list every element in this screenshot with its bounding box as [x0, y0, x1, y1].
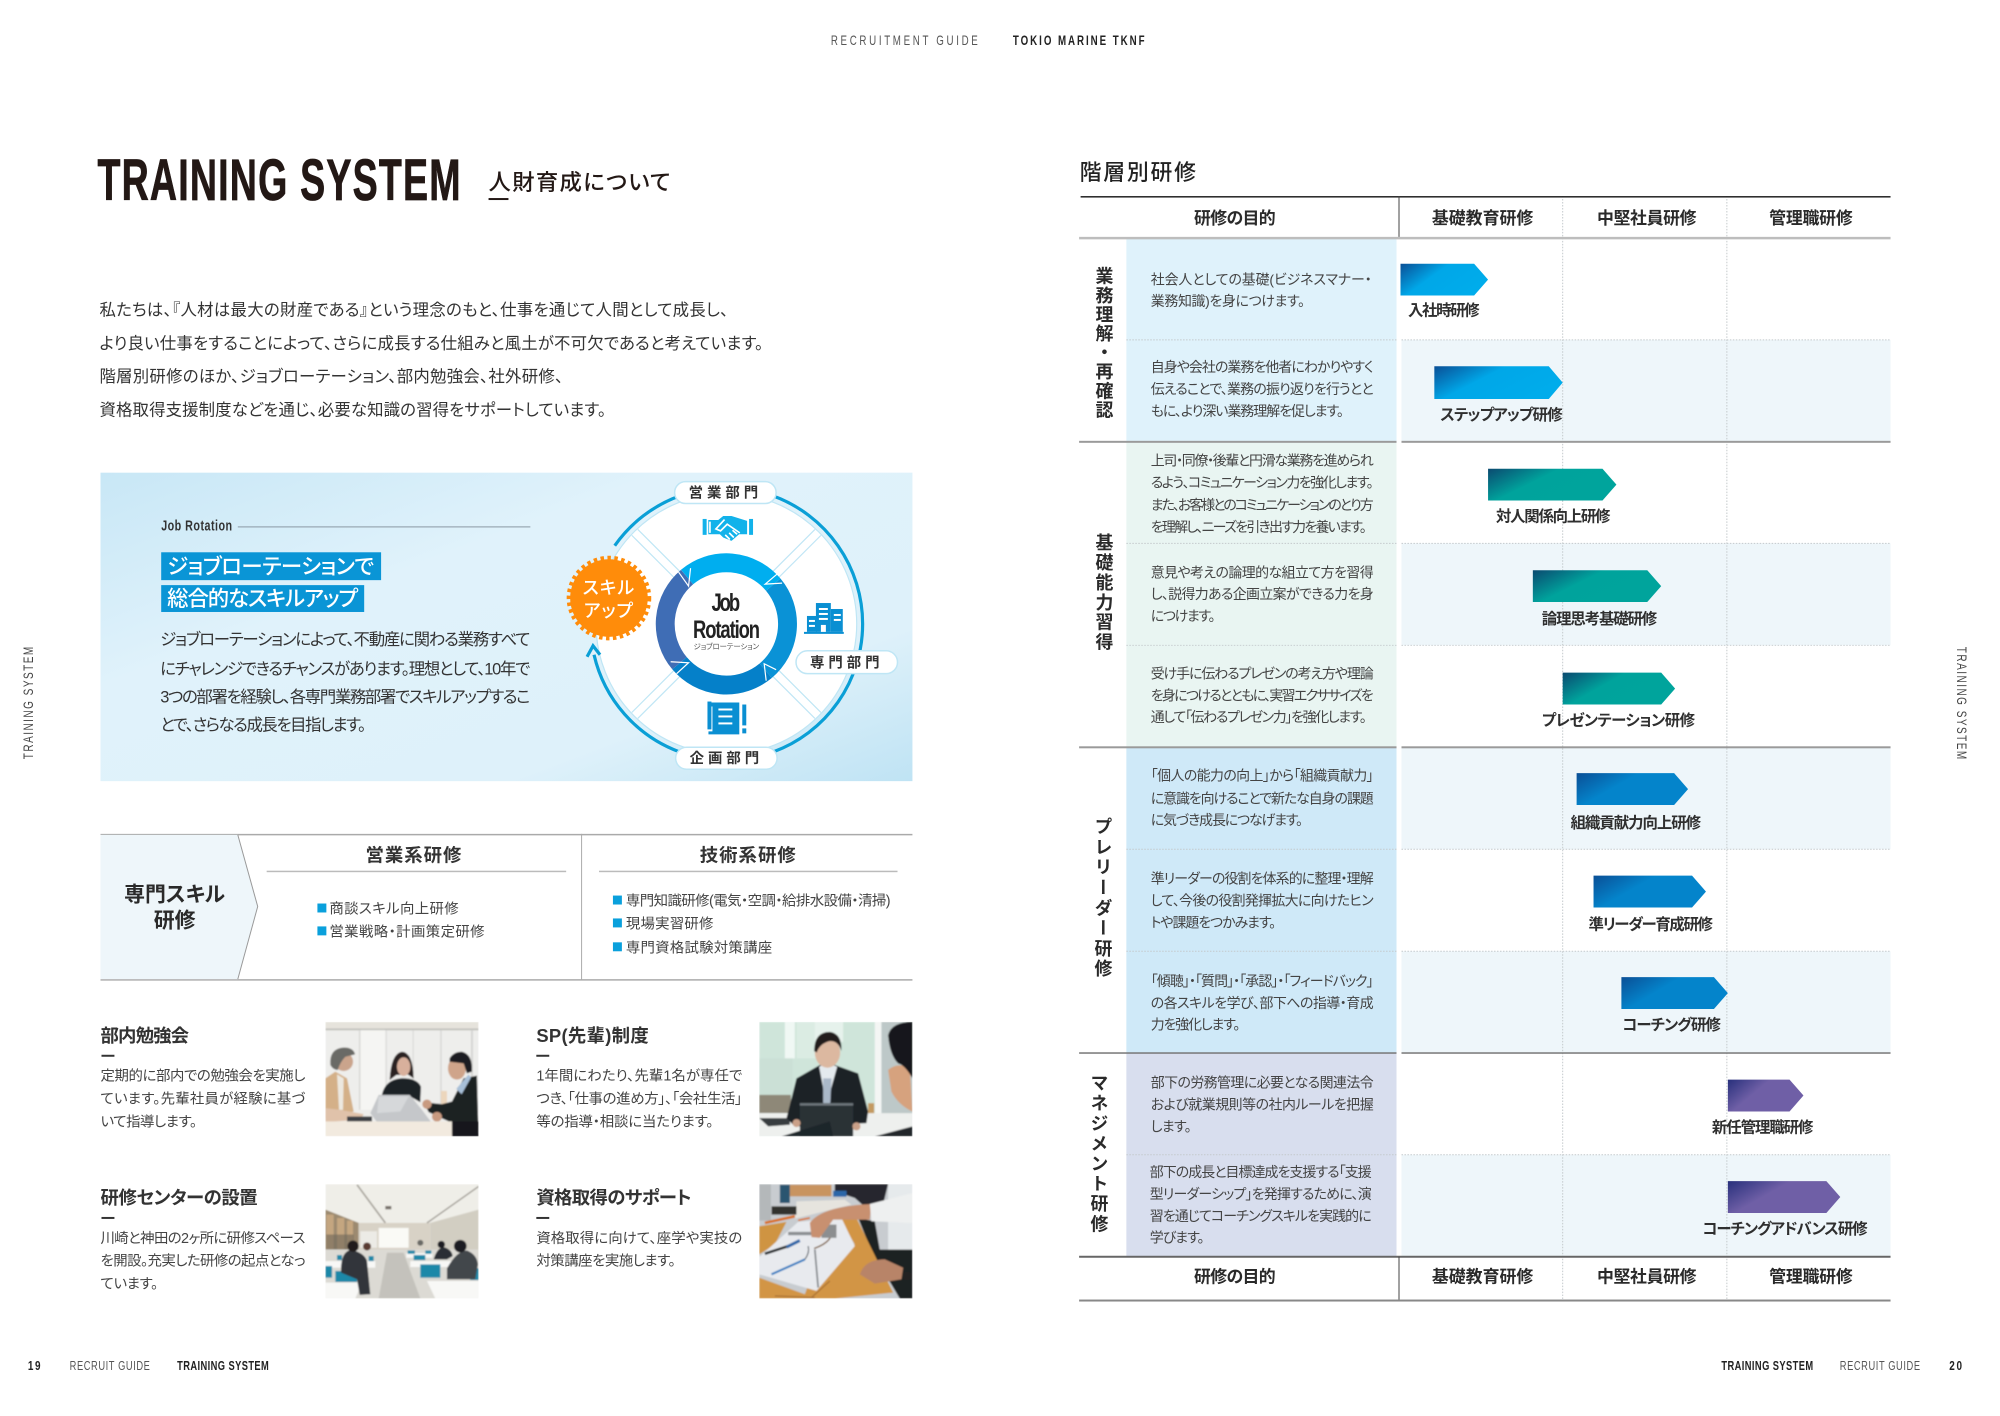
row 1: 業務知識)を身につけます。: [1151, 293, 1305, 309]
arrow: new manager training: [1712, 1080, 1814, 1136]
arrow: advanced coaching training: [1702, 1181, 1868, 1238]
pill: sales dept: [675, 482, 776, 504]
intro text: [100, 301, 763, 419]
row 8: [1151, 973, 1728, 1034]
card: study sessions: [100, 1025, 305, 1130]
footer left: 19: [28, 1360, 41, 1374]
arrow: advanced coaching training: コーチングアドバンス研修: [1702, 1219, 1868, 1238]
skill heading: 専門スキル: [124, 884, 225, 907]
photo: training room: [325, 1184, 479, 1298]
icon: building: [804, 603, 844, 634]
sales training column: [267, 845, 566, 940]
pill: specialist dept: 専門部門: [810, 654, 884, 672]
row 5: 通して「伝わるプレゼン力」を強化します。: [1151, 709, 1367, 725]
card: training center: ています。: [100, 1276, 158, 1293]
outer cycle arrow: [587, 496, 863, 752]
category labels: 業務理解・再確認: [1093, 267, 1113, 420]
card: senior partner system: つき、「仕事の進め方」、「会社生活」: [536, 1091, 742, 1108]
arrow: new hire training: [1400, 264, 1488, 319]
arrow: presentation training: プレゼンテーション研修: [1542, 710, 1696, 729]
card: study sessions: ています。先輩社員が経験に基づ: [100, 1091, 305, 1108]
top header: [831, 32, 1145, 48]
footer left: TRAINING SYSTEM: [177, 1360, 269, 1374]
arrow: logical thinking training: 論理思考基礎研修: [1542, 610, 1658, 628]
job rotation body text: にチャレンジできるチャンスがあります。理想として、10年で: [160, 661, 531, 679]
row 8: 力を強化します。: [1151, 1016, 1240, 1032]
row 10: 部下の成長と目標達成を支援する「支援: [1150, 1164, 1372, 1180]
skill heading: 研修: [154, 909, 196, 932]
card: training center: 川崎と神田の2ヶ所に研修スペース: [100, 1230, 305, 1247]
footer right: TRAINING SYSTEM: [1721, 1360, 1813, 1374]
row 6: に気づき成長につなげます。: [1151, 812, 1303, 828]
row 9: および就業規則等の社内ルールを把握: [1151, 1096, 1374, 1112]
top column headers: 基礎教育研修: [1432, 209, 1533, 228]
sales training column: 営業系研修: [365, 845, 462, 866]
card: qualification support: 資格取得のサポート: [536, 1187, 692, 1208]
sales training column: 営業戦略・計画策定研修: [329, 923, 485, 940]
row 3: 上司・同僚・後輩と円滑な業務を進められ: [1151, 453, 1374, 469]
card: senior partner system: SP(先輩)制度: [536, 1025, 649, 1046]
row 4: につけます。: [1151, 608, 1215, 624]
job rotation body text: とで、さらなる成長を目指します。: [160, 716, 366, 734]
row 7: トや課題をつかみます。: [1151, 914, 1276, 930]
row 6: [1151, 768, 1702, 832]
top column headers: 中堅社員研修: [1597, 209, 1697, 228]
top header: RECRUITMENT GUIDE: [831, 32, 978, 48]
technical training column: 現場実習研修: [626, 915, 714, 932]
row 10: 型リーダーシップ」を発揮するために、演: [1150, 1186, 1372, 1202]
row 2: 伝えることで、業務の振り返りを行うとと: [1151, 381, 1374, 397]
row 6: 「個人の能力の向上」から「組織貢献力」: [1151, 768, 1374, 784]
bottom column headers: 管理職研修: [1769, 1267, 1853, 1287]
row 5: を身につけるとともに、実習エクササイズを: [1151, 688, 1374, 704]
job rotation body text: ジョブローテーションによって、不動産に関わる業務すべて: [160, 630, 530, 649]
bottom column headers: 研修の目的: [1194, 1268, 1276, 1287]
panel: job rotation: [100, 473, 912, 781]
row 9: 部下の労務管理に必要となる関連法令: [1151, 1075, 1374, 1091]
job rotation body text: 3つの部署を経験し、各専門業務部署でスキルアップするこ: [160, 689, 530, 707]
center label: ジョブローテーション: [694, 641, 759, 651]
table rules: [1079, 196, 1891, 1302]
category labels: [1089, 267, 1113, 1235]
row 10: [1150, 1164, 1868, 1245]
row 3: また、お客様とのコミュニケーションのとり方: [1151, 497, 1374, 513]
bottom column headers: 基礎教育研修: [1432, 1268, 1533, 1287]
pill: planning dept: 企画部門: [690, 749, 763, 767]
row 9: します。: [1151, 1118, 1192, 1134]
card: qualification support: 対策講座を実施します。: [536, 1253, 676, 1270]
photo: man in suit with tablet: [759, 1022, 912, 1136]
arrow: new hire training: 入社時研修: [1408, 301, 1480, 319]
pill: sales dept: 営業部門: [689, 484, 762, 502]
row 7: して、今後の役割発揮拡大に向けたヒン: [1151, 893, 1374, 909]
highlighted heading: [161, 552, 381, 612]
row tints: [1126, 196, 1891, 1301]
heading: tiered training: 階層別研修: [1080, 160, 1196, 185]
center label: Job: [711, 588, 740, 617]
arrow: step up training: [1434, 366, 1563, 424]
row 8: の各スキルを学び、部下への指導・育成: [1151, 995, 1374, 1011]
highlighted heading: ジョブローテーションで: [167, 554, 374, 579]
badge: skill up: アップ: [584, 601, 634, 621]
arrow: logical thinking training: [1533, 570, 1661, 628]
row 3: [1151, 453, 1616, 535]
title: 人財育成について: [489, 170, 671, 195]
row 4: し、説得力ある企画立案ができる力を身: [1151, 586, 1374, 602]
card: qualification support: 資格取得に向けて、座学や実技の: [536, 1230, 742, 1247]
row 5: [1151, 666, 1696, 729]
rotation diagram: [569, 482, 898, 769]
bottom column headers: 中堅社員研修: [1597, 1268, 1697, 1287]
badge: skill up: スキル: [583, 578, 635, 598]
arrow: new manager training: 新任管理職研修: [1712, 1117, 1814, 1136]
top header: TOKIO MARINE TKNF: [1013, 32, 1145, 48]
title: [98, 148, 671, 213]
row 1: 社会人としての基礎(ビジネスマナー・: [1151, 272, 1372, 288]
card: senior partner system: [536, 1025, 742, 1130]
card: qualification support: [536, 1187, 742, 1270]
intro text: 階層別研修のほか、ジョブローテーション、部内勉強会、社外研修、: [100, 367, 563, 386]
arrow: organizational contribution training: 組織貢献力向上研修: [1571, 814, 1702, 832]
inner ring: [665, 563, 788, 685]
arrow: coaching training: コーチング研修: [1622, 1015, 1721, 1034]
badge: skill up: [569, 558, 649, 638]
row 6: に意識を向けることで新たな自身の課題: [1151, 791, 1374, 807]
row 10: 習を通じてコーチングスキルを実践的に: [1150, 1208, 1372, 1224]
arrow: junior leader training: [1589, 876, 1714, 933]
row 3: るよう、コミュニケーション力を強化します。: [1151, 475, 1374, 491]
card: study sessions: 定期的に部内での勉強会を実施し: [100, 1068, 305, 1085]
arrow: interpersonal training: [1488, 469, 1616, 525]
job rotation body text: [160, 630, 531, 734]
row 5: 受け手に伝わるプレゼンの考え方や理論: [1151, 666, 1374, 682]
row 1: [1151, 264, 1488, 319]
icon: document: [707, 702, 746, 734]
pill: specialist dept: [796, 651, 898, 674]
category labels: 基礎能力習得: [1093, 533, 1113, 653]
panel: specialist skill training: [100, 834, 912, 981]
row 4: 意見や考えの論理的な組立て方を習得: [1151, 565, 1374, 581]
center label: [693, 588, 760, 651]
card: study sessions: いて指導します。: [100, 1113, 197, 1130]
row 7: [1151, 871, 1714, 933]
row 2: もに、より深い業務理解を促します。: [1151, 403, 1344, 419]
row 9: [1151, 1075, 1814, 1136]
top column headers: 管理職研修: [1769, 208, 1853, 228]
footer right: RECRUIT GUIDE: [1840, 1360, 1920, 1374]
center label: Rotation: [693, 615, 760, 644]
card: senior partner system: 等の指導・相談に当たります。: [536, 1112, 713, 1130]
job rotation label: Job Rotation: [161, 517, 232, 534]
table: tiered training: [1079, 196, 1891, 1302]
card: training center: を開設。充実した研修の起点となっ: [100, 1253, 305, 1270]
arrow: interpersonal training: 対人関係向上研修: [1496, 507, 1611, 525]
arrow: step up training: ステップアップ研修: [1440, 406, 1563, 424]
row 8: 「傾聴」・「質問」・「承認」・「フィードバック」: [1151, 973, 1374, 989]
row 3: を理解し、ニーズを引き出す力を養います。: [1151, 519, 1367, 535]
pill: planning dept: [676, 747, 777, 769]
footer right: 20: [1949, 1360, 1962, 1374]
side label left: TRAINING SYSTEM: [20, 647, 36, 759]
sales training column: 商談スキル向上研修: [329, 900, 459, 917]
intro text: 資格取得支援制度などを通じ、必要な知識の習得をサポートしています。: [100, 401, 606, 419]
footer left: RECRUIT GUIDE: [70, 1360, 150, 1374]
side label right: TRAINING SYSTEM: [1954, 647, 1970, 759]
arrow: presentation training: [1542, 673, 1696, 729]
photo: meeting of three: [325, 1022, 479, 1136]
footer right: [1721, 1360, 1962, 1374]
intro text: より良い仕事をすることによって、さらに成長する仕組みと風土が不可欠であると考えています。: [100, 335, 763, 353]
arrow: coaching training: [1621, 977, 1728, 1034]
title: TRAINING SYSTEM: [98, 148, 460, 213]
card: study sessions: 部内勉強会: [100, 1025, 190, 1046]
top column headers: 研修の目的: [1194, 209, 1276, 228]
row 7: 準リーダーの役割を体系的に整理・理解: [1151, 871, 1374, 887]
highlighted heading: 総合的なスキルアップ: [167, 587, 358, 611]
category labels: プレリーダー研修: [1092, 817, 1112, 980]
row 2: 自身や会社の業務を他者にわかりやすく: [1151, 359, 1374, 375]
arrow: organizational contribution training: [1571, 773, 1702, 832]
technical training column: [599, 845, 898, 956]
technical training column: 技術系研修: [700, 845, 797, 866]
bottom column headers: [1194, 1267, 1853, 1287]
technical training column: 専門資格試験対策講座: [626, 939, 772, 956]
row 10: 学びます。: [1150, 1229, 1204, 1245]
top column headers: [1194, 208, 1853, 228]
technical training column: 専門知識研修(電気・空調・給排水設備・清掃): [626, 892, 891, 910]
icon: handshake: [702, 516, 754, 541]
skill heading: [124, 884, 225, 932]
arrow: junior leader training: 準リーダー育成研修: [1589, 914, 1714, 933]
card: training center: [100, 1187, 305, 1293]
row 4: [1151, 565, 1661, 628]
category labels: マネジメント研修: [1089, 1074, 1109, 1235]
photo: workbench with tools: [759, 1184, 912, 1298]
card: senior partner system: 1年間にわたり、先輩1名が専任で: [536, 1068, 742, 1085]
intro text: 私たちは、『人材は最大の財産である』という理念のもと、仕事を通じて人間として成長し、: [100, 301, 728, 319]
row 2: [1151, 359, 1563, 424]
footer left: [28, 1360, 269, 1374]
card: training center: 研修センターの設置: [100, 1187, 258, 1208]
